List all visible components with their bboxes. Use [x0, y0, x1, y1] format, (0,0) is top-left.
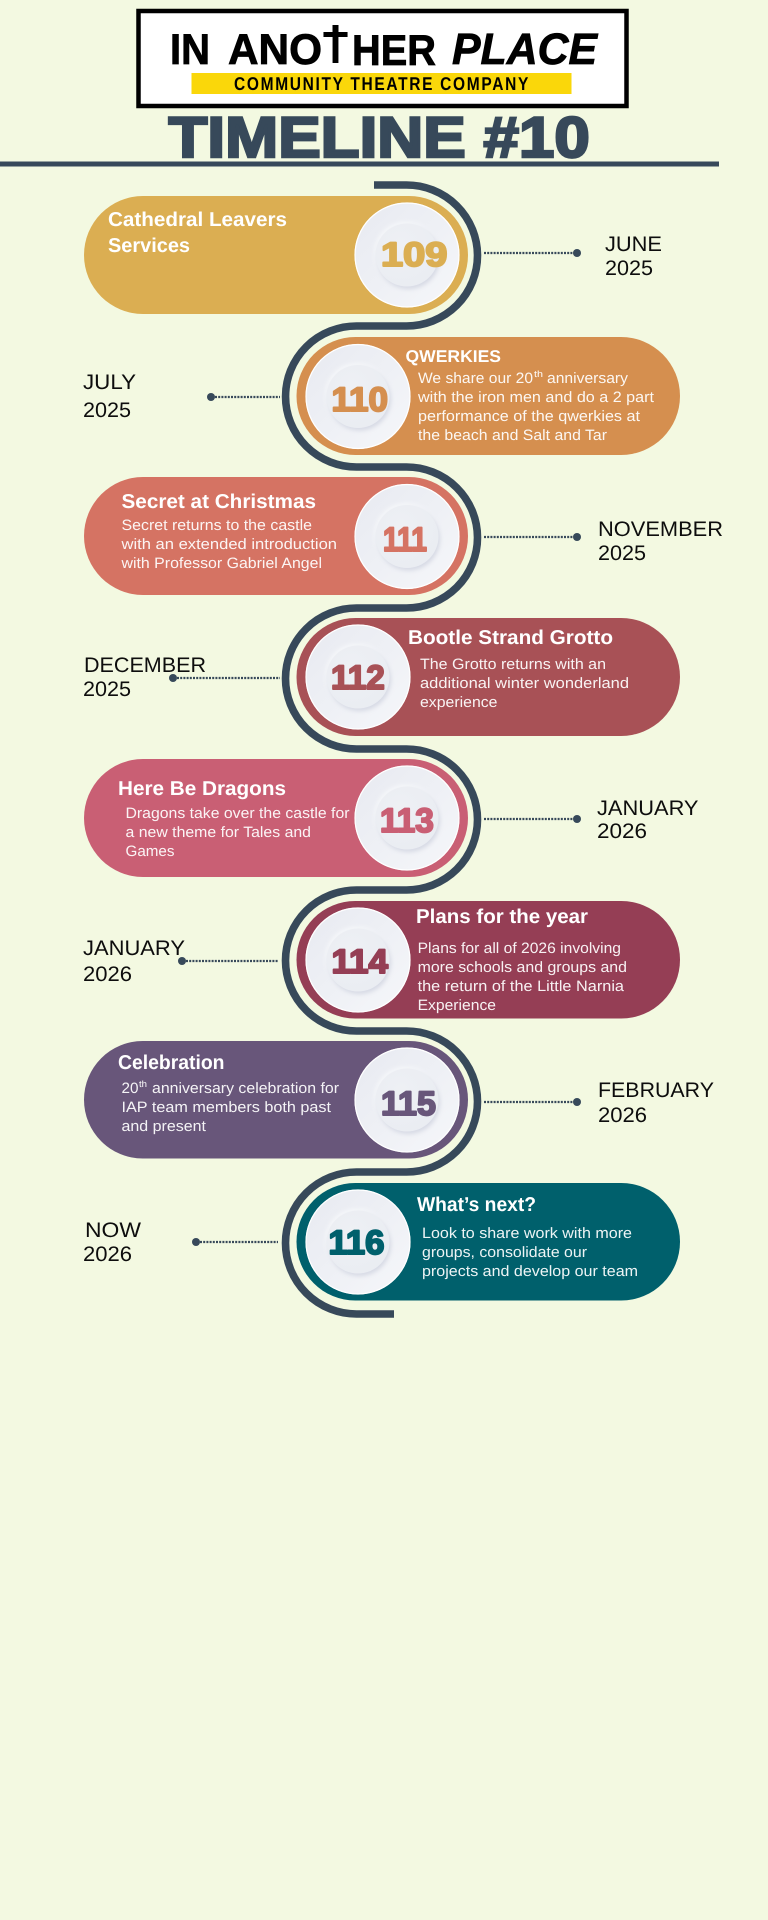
body text: Celebration: and present — [122, 1118, 207, 1135]
body text: Secret at Christmas: with Professor Gabriel Angel — [120, 555, 322, 572]
date: January 2026 (right) — [597, 797, 698, 843]
body text: QWERKIES: We share our 20 — [418, 370, 533, 387]
logo — [138, 11, 626, 106]
heading: QWERKIES: QWERKIES — [406, 347, 501, 366]
title: TIMELINE #10 — [168, 106, 590, 170]
body text: Plans for the year: more schools and groups and — [418, 959, 627, 976]
number badge: 114 — [306, 908, 410, 1012]
date: December 2025: 2025 — [83, 678, 131, 701]
number badge: 113: 113 — [380, 802, 434, 840]
winding timeline spine — [286, 185, 477, 1314]
number badge: 111 — [354, 484, 460, 589]
body text: Bootle Strand Grotto: The Grotto returns with an — [420, 656, 606, 673]
date: July 2025: 2025 — [83, 399, 131, 422]
date: December 2025 — [83, 654, 206, 701]
number badge: 109 — [354, 202, 460, 308]
body text: Celebration: th — [139, 1079, 147, 1089]
body text: Here Be Dragons: Games — [126, 843, 174, 860]
date: February 2026: FEBRUARY — [598, 1079, 714, 1102]
body text: Bootle Strand Grotto — [420, 656, 629, 711]
body text: QWERKIES: th — [534, 369, 543, 379]
connector: January 2026 (right) — [484, 815, 581, 823]
number badge: 116: 116 — [328, 1224, 384, 1262]
body text: Plans for the year: the return of the Little Narnia — [418, 978, 625, 995]
logo tagline: COMMUNITY THEATRE COMPANY — [234, 73, 530, 94]
panel: 115 Celebration — [84, 1041, 468, 1158]
date: July 2025: JULY — [83, 371, 136, 394]
body text: Plans for the year: Experience — [418, 997, 496, 1014]
date: June 2025: JUNE — [605, 233, 662, 256]
date: July 2025 — [83, 371, 136, 422]
body text: Secret at Christmas: Secret returns to the castle — [122, 517, 312, 534]
connector: December 2025 — [169, 674, 280, 682]
body text: Celebration — [122, 1079, 339, 1135]
date: February 2026: 2026 — [598, 1104, 647, 1127]
number badge: 111: 111 — [383, 521, 427, 559]
date: February 2026 — [598, 1079, 714, 1127]
connector: Now 2026 — [192, 1238, 278, 1246]
panel: 110 QWERKIES — [296, 337, 680, 455]
body text: Secret at Christmas: with an extended introduction — [120, 536, 337, 553]
logo wordmark: HER — [352, 27, 436, 75]
heading: Secret at Christmas: Secret at Christmas — [122, 491, 316, 513]
panel: 114 Plans for the year — [296, 901, 680, 1018]
number badge: 109: 109 — [381, 236, 447, 274]
panel: 111 Secret at Christmas — [84, 477, 468, 595]
number badge: 115: 115 — [381, 1085, 436, 1123]
connector: February 2026 — [484, 1098, 581, 1106]
date: January 2026 (right): JANUARY — [597, 797, 698, 820]
body text: What's next?: groups, consolidate our — [422, 1244, 587, 1261]
date: January 2026 (left) — [83, 937, 185, 986]
date: Now 2026: 2026 — [83, 1243, 132, 1266]
body text: Here Be Dragons: Dragons take over the castle for — [126, 805, 350, 822]
date: June 2025 — [605, 233, 662, 280]
body text: Celebration: anniversary celebration for — [152, 1080, 339, 1097]
heading: Here Be Dragons: Here Be Dragons — [118, 778, 286, 800]
logo wordmark — [170, 22, 599, 75]
body text: QWERKIES — [417, 369, 655, 444]
body text: Plans for the year: Plans for all of 2026 involving — [418, 940, 621, 957]
connector: June 2025 — [484, 249, 581, 257]
heading: Plans for the year: Plans for the year — [416, 906, 588, 928]
number badge: 116 — [306, 1190, 410, 1294]
logo wordmark: T — [323, 22, 348, 73]
logo wordmark: PLACE — [452, 25, 599, 74]
body text: QWERKIES: performance of the qwerkies at — [418, 408, 641, 425]
panel: 112 Bootle Strand Grotto — [296, 618, 680, 736]
number badge: 114: 114 — [332, 943, 388, 981]
date: December 2025: DECEMBER — [84, 654, 206, 677]
heading: Cathedral Leavers Services — [108, 209, 287, 257]
date: Now 2026: NOW — [85, 1219, 141, 1242]
panel: 109 Cathedral Leavers Services — [84, 196, 468, 314]
connector: November 2025 — [484, 533, 581, 541]
heading: Bootle Strand Grotto: Bootle Strand Grotto — [408, 627, 613, 649]
logo wordmark: IN — [170, 26, 210, 74]
body text: QWERKIES: with the iron men and do a 2 part — [417, 389, 655, 406]
connector: July 2025 — [207, 393, 280, 401]
body text: Here Be Dragons: a new theme for Tales and — [126, 824, 311, 841]
body text: Bootle Strand Grotto: experience — [420, 694, 498, 711]
body text: What's next? — [422, 1225, 638, 1280]
heading: What's next?: What’s next? — [417, 1194, 536, 1216]
date: January 2026 (right): 2026 — [597, 820, 647, 843]
body text: What's next?: projects and develop our team — [422, 1263, 638, 1280]
body text: What's next?: Look to share work with more — [422, 1225, 632, 1242]
number badge: 110: 110 — [332, 381, 388, 419]
date: November 2025 — [598, 518, 723, 565]
heading: Cathedral Leavers Services: Services — [108, 235, 190, 257]
body text: Bootle Strand Grotto: additional winter wonderland — [420, 675, 629, 692]
body text: QWERKIES: the beach and Salt and Tar — [418, 427, 607, 444]
number badge: 113 — [354, 766, 460, 870]
number badge: 112: 112 — [331, 659, 385, 697]
logo wordmark: ANO — [228, 26, 322, 74]
number badge: 110 — [306, 344, 410, 449]
date: November 2025: 2025 — [598, 542, 646, 565]
date: November 2025: NOVEMBER — [598, 518, 723, 541]
date: Now 2026 — [83, 1219, 141, 1266]
body text: Plans for the year — [418, 940, 627, 1014]
body text: Celebration: IAP team members both past — [122, 1099, 332, 1116]
number badge: 112 — [306, 624, 410, 730]
connector: January 2026 (left) — [178, 957, 278, 965]
date: January 2026 (left): JANUARY — [83, 937, 185, 960]
panel: 113 Here Be Dragons — [84, 759, 468, 877]
body text: Secret at Christmas — [120, 517, 337, 572]
panel: 116 What's next? — [296, 1183, 680, 1300]
date: January 2026 (left): 2026 — [83, 963, 132, 986]
body text: Celebration: 20 — [122, 1080, 138, 1097]
date: June 2025: 2025 — [605, 257, 653, 280]
body text: QWERKIES: anniversary — [547, 370, 629, 387]
heading: Celebration: Celebration — [118, 1052, 224, 1074]
number badge: 115 — [354, 1048, 460, 1152]
heading: Cathedral Leavers Services: Cathedral Leavers — [108, 209, 287, 231]
body text: Here Be Dragons — [126, 805, 350, 860]
